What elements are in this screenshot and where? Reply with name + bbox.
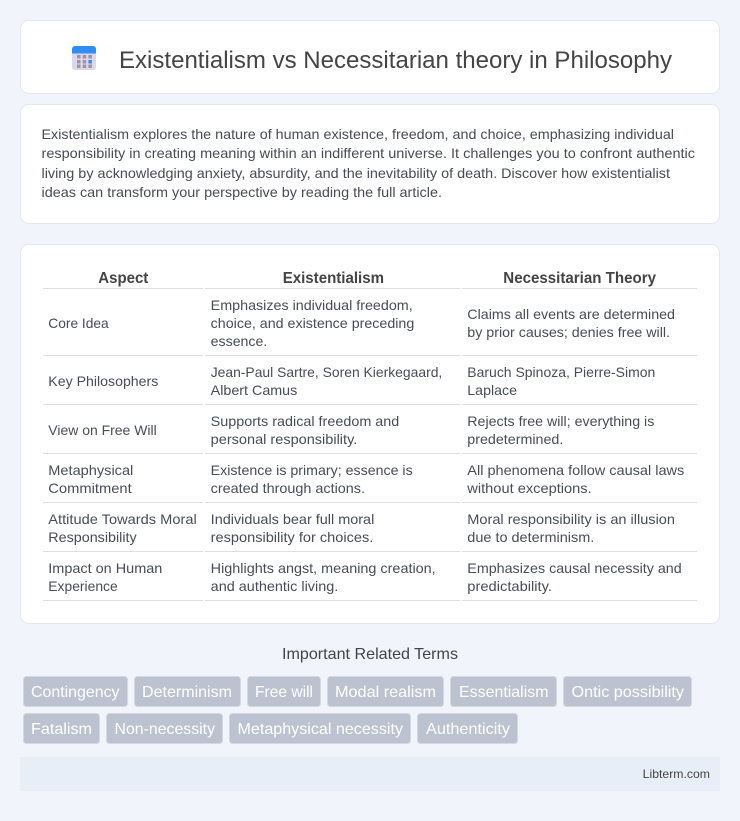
tag: Modal realism [328, 676, 444, 706]
tag: Metaphysical necessity [230, 714, 410, 744]
panel: related term tags [24, 676, 692, 744]
title: Existentialism vs Necessitarian theory in Philosophy [119, 47, 672, 74]
tag: Determinism [134, 676, 240, 706]
tag: Ontic possibility: Ontic possibility [572, 684, 684, 701]
table row: impact on human experience: Impact on Human [48, 560, 162, 576]
table row: key philosophers: Baruch Spinoza, Pierre-Simon [467, 364, 655, 380]
icon: calendar [72, 46, 96, 70]
text block: introduction paragraph: Existentialism explores the nature of human existence, freedom, and choice, emphasizing individual [42, 126, 674, 142]
table row: key philosophers [43, 364, 697, 405]
tag: Essentialism [450, 676, 556, 706]
table row: view on free will: View on Free Will [48, 422, 157, 438]
table row: attitude towards moral responsibility: Individuals bear full moral [211, 511, 374, 527]
table row: impact on human experience: and authentic living. [211, 578, 338, 594]
table row: attitude towards moral responsibility: Responsibility [48, 529, 137, 545]
table row: core idea: Core Idea [48, 315, 109, 331]
table row: view on free will: Rejects free will; everything is [467, 413, 654, 429]
tag: Essentialism: Essentialism [459, 684, 548, 701]
table row: impact on human experience: Experience [48, 578, 118, 594]
heading: important related terms: Important Related Terms [282, 646, 458, 663]
table row: key philosophers: Albert Camus [211, 382, 297, 398]
tag: Modal realism: Modal realism [335, 684, 436, 701]
tag: Fatalism [24, 714, 100, 744]
table header row [43, 270, 697, 289]
table row: impact on human experience: predictability. [467, 578, 552, 594]
table header row: Existentialism [283, 270, 384, 287]
tag: Fatalism: Fatalism [31, 721, 92, 738]
table row: core idea: choice, and existence preceding [211, 315, 414, 331]
table row: core idea: essence. [211, 333, 267, 349]
panel: comparison table [20, 244, 720, 624]
table row: view on free will: personal responsibility. [211, 431, 357, 447]
text block: introduction paragraph: responsibility in creating meaning within an indifferent universe. It challenges you to confront authentic [42, 145, 695, 161]
tag: Free will: Free will [255, 684, 313, 701]
tag: Non-necessity [106, 714, 222, 744]
panel: introduction [20, 104, 720, 224]
tag: Ontic possibility [564, 676, 692, 706]
tag: Free will [248, 676, 320, 706]
table row: metaphysical commitment: All phenomena follow causal laws [467, 462, 684, 478]
table row: view on free will: Supports radical freedom and [211, 413, 399, 429]
table row: metaphysical commitment [43, 462, 697, 503]
table row: key philosophers: Jean-Paul Sartre, Soren Kierkegaard, [211, 364, 442, 380]
table row: core idea: by prior causes; denies free will. [467, 324, 670, 340]
table row: impact on human experience: Highlights angst, meaning creation, [211, 560, 436, 576]
table row: metaphysical commitment: Commitment [48, 480, 132, 496]
table row: view on free will [43, 413, 697, 454]
text block: introduction paragraph [42, 126, 695, 200]
table row: impact on human experience: Emphasizes causal necessity and [467, 560, 682, 576]
table header row: Aspect [98, 270, 149, 287]
text block: introduction paragraph: living by acknowledging anxiety, absurdity, and the inevitability of death. Discover how existentialist [42, 165, 670, 181]
table header row: Necessitarian Theory [503, 270, 656, 287]
table row: key philosophers: Laplace [467, 382, 517, 398]
table row: metaphysical commitment: created through actions. [211, 480, 365, 496]
table row: core idea: Emphasizes individual freedom, [211, 297, 413, 313]
tag: Authenticity: Authenticity [426, 721, 510, 738]
tag: Contingency: Contingency [31, 684, 120, 701]
table row: attitude towards moral responsibility [43, 511, 697, 552]
table row: attitude towards moral responsibility: Attitude Towards Moral [48, 511, 197, 527]
table row: core idea: Claims all events are determined [467, 306, 675, 322]
table row: attitude towards moral responsibility: Moral responsibility is an illusion [467, 511, 675, 527]
table row: metaphysical commitment: Metaphysical [48, 462, 133, 478]
tag: Determinism: Determinism [142, 684, 232, 701]
table row: impact on human experience [43, 560, 697, 601]
tag: Non-necessity: Non-necessity [114, 721, 215, 738]
table row: metaphysical commitment: Existence is primary; essence is [211, 462, 413, 478]
table row: attitude towards moral responsibility: responsibility for choices. [211, 529, 373, 545]
footer [20, 757, 720, 791]
tag: Contingency [24, 676, 128, 706]
text block: introduction paragraph: ideas can transform your perspective by reading the full article. [42, 184, 442, 200]
tag: Authenticity [418, 714, 518, 744]
table row: metaphysical commitment: without exceptions. [466, 480, 592, 496]
footer credit: Libterm.com [643, 767, 710, 781]
table row: view on free will: predetermined. [467, 431, 563, 447]
table row: core idea [43, 297, 697, 356]
table row: key philosophers: Key Philosophers [48, 373, 158, 389]
table row: attitude towards moral responsibility: due to determinism. [467, 529, 594, 545]
panel: header [20, 20, 720, 94]
tag: Metaphysical necessity: Metaphysical necessity [238, 721, 403, 738]
